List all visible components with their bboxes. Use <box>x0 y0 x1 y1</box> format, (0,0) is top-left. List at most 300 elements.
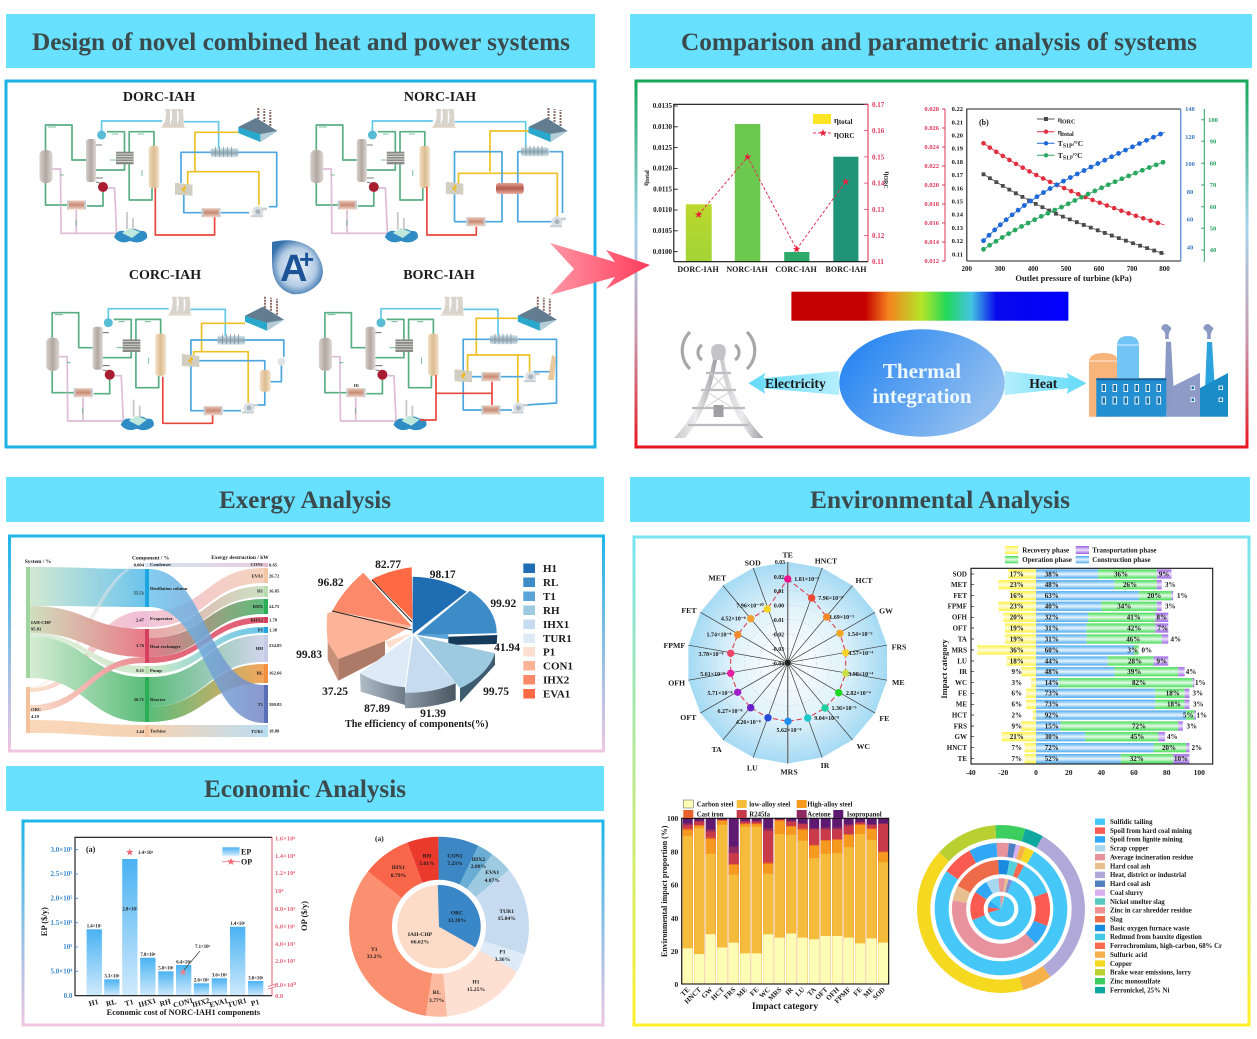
legend: waste streams: Spoil from hard coal mining <box>1110 828 1192 835</box>
line chart: outlet pressure of turbine: 0.19 <box>952 146 964 152</box>
radar chart: impact categories: 1.36×10⁻³ <box>832 706 857 712</box>
stacked bar chart: life-cycle phases: IR <box>959 668 968 676</box>
line chart: outlet pressure of turbine: 800 <box>1159 265 1170 273</box>
stacked bar chart: life-cycle phases: MRS <box>951 646 967 654</box>
legend: pie chart: P1 <box>543 646 555 658</box>
schematic: BORC-IAH: H1 <box>354 383 359 388</box>
donut chart: cost share: 33.38% <box>448 918 466 924</box>
sankey: exergy destruction flows: 24.75 <box>269 604 280 609</box>
sankey: exergy destruction flows: 55.51 <box>134 590 145 596</box>
legend: pie chart: IHX1 <box>543 619 569 631</box>
stacked bar chart: life-cycle phases: 45% <box>1130 733 1144 741</box>
bar chart: economic cost of components: Economic cost of NORC-IAH1 components <box>107 1008 261 1017</box>
stacked bar chart: life-cycle phases: 15% <box>1045 722 1059 730</box>
stacked bar chart: material contribution: HNCT <box>683 986 703 1006</box>
stacked bar chart: life-cycle phases: 48% <box>1045 581 1059 589</box>
legend: line chart: T <box>1058 151 1063 160</box>
legend: waste streams <box>1095 818 1222 994</box>
line chart: outlet pressure of turbine: 600 <box>1094 265 1105 273</box>
pie chart: efficiency of components: 82.77 <box>375 559 401 571</box>
legend: waste streams: Sulfidic tailing <box>1110 819 1153 826</box>
line chart: outlet pressure of turbine: 90 <box>1210 138 1216 146</box>
bar chart: economic cost of components: 1.6×10⁴ <box>275 836 295 842</box>
donut chart: cost share: IHX1 <box>392 865 405 871</box>
header: Comparison and parametric analysis of systems: Comparison and parametric analysis of systems <box>681 29 1197 56</box>
line chart: outlet pressure of turbine: 0.21 <box>952 120 963 126</box>
bar chart: economic cost of components: 2.5×10⁵ <box>51 870 72 878</box>
legend: waste streams: Sulfuric acid <box>1110 952 1147 959</box>
legend: phases: Operation phase <box>1022 556 1072 564</box>
legend: line chart: ORC <box>1062 120 1075 126</box>
stacked bar chart: material contribution: 0 <box>675 980 679 989</box>
bar chart: economic cost of components: 1.4×10⁴ <box>275 853 295 860</box>
bar chart: economic cost of components: 1.2×10⁴ <box>275 870 295 877</box>
stacked bar chart: life-cycle phases: LU <box>957 658 967 666</box>
legend: waste streams: Coal slurry <box>1110 890 1144 897</box>
bar chart: efficiency of four systems: total <box>839 118 852 126</box>
bar chart: efficiency of four systems: 0.0130 <box>653 123 672 131</box>
stacked bar chart: life-cycle phases: Impact category <box>939 639 949 699</box>
stacked bar chart: material contribution: 20 <box>671 947 679 956</box>
line chart: outlet pressure of turbine: 80 <box>1187 189 1193 196</box>
bar chart: efficiency of four systems: ORC <box>882 175 888 189</box>
legend: waste streams: Zinc monosulfate <box>1110 978 1160 986</box>
sankey: exergy destruction flows: TUR1 <box>251 729 264 734</box>
legend: pie chart: CON1 <box>543 660 573 672</box>
stacked bar chart: life-cycle phases: 19% <box>1010 624 1024 632</box>
series: T S1J <box>984 162 1164 249</box>
radar chart: impact categories: TE <box>782 550 793 560</box>
stacked bar chart: life-cycle phases: 9% <box>1159 570 1169 578</box>
stacked bar chart: life-cycle phases: 73% <box>1045 700 1059 708</box>
stacked bar chart: life-cycle phases: OFT <box>953 624 967 632</box>
header: Environmental Analysis: Environmental Analysis <box>810 487 1070 514</box>
bar chart: efficiency of four systems: 0.0100 <box>653 248 672 256</box>
legend: waste streams: Scrap copper <box>1110 846 1149 853</box>
line chart: outlet pressure of turbine: 140 <box>1185 106 1195 113</box>
legend: materials: Carbon steel <box>697 802 734 808</box>
line chart: outlet pressure of turbine: 100 <box>1185 161 1195 168</box>
radar chart: impact categories: 5.71×10⁻⁸ <box>708 691 733 697</box>
donut chart: cost share <box>367 834 516 1004</box>
arrow: red link between panels <box>550 243 650 295</box>
stacked bar chart: life-cycle phases: 19% <box>1010 636 1024 644</box>
legend: line chart: η <box>1058 128 1062 136</box>
legend: pie chart <box>523 563 573 700</box>
stacked bar chart: material contribution: LU <box>794 986 806 998</box>
line chart: outlet pressure of turbine: 300 <box>995 265 1006 273</box>
stacked bar chart: life-cycle phases: 3% <box>1011 679 1022 687</box>
stacked bar chart: life-cycle phases: 20% <box>1010 614 1024 622</box>
radar chart: impact categories: WC <box>857 742 870 751</box>
sankey: exergy destruction flows: 3.76 <box>136 643 145 648</box>
stacked bar chart: life-cycle phases: 28% <box>1128 658 1142 666</box>
legend: line chart: S1J <box>1063 156 1072 162</box>
stacked bar chart: life-cycle phases: 9% <box>1011 722 1022 730</box>
bar chart: economic cost of components: OP <box>241 858 252 866</box>
bar chart: economic cost of components: 5.0×10⁴ <box>158 966 174 972</box>
donut chart: cost share: T1 <box>371 947 378 953</box>
sankey: exergy destruction flows: RHX2 <box>250 618 264 622</box>
stacked bar chart: life-cycle phases: 72% <box>1132 722 1146 730</box>
bar chart: economic cost of components: 1.4×10⁴ <box>138 850 154 856</box>
arrow: heat <box>1005 371 1086 395</box>
stacked bar chart: life-cycle phases: 4% <box>1167 733 1178 741</box>
sankey: exergy destruction flows: 1.38 <box>269 628 278 632</box>
radar chart: impact categories: TA <box>712 745 722 754</box>
stacked bar chart: life-cycle phases: 31% <box>1045 636 1059 644</box>
radar chart: impact categories: 2.82×10⁻⁴ <box>846 691 871 697</box>
bar chart: economic cost of components: T1 <box>124 997 135 1008</box>
line chart: outlet pressure of turbine: 0.14 <box>952 212 964 218</box>
radar chart: impact categories: -0.01 <box>772 618 784 624</box>
stacked bar chart: life-cycle phases: 82% <box>1132 679 1146 687</box>
legend: pie chart: TUR1 <box>543 633 572 645</box>
legend: waste streams: Hard coal ash <box>1110 881 1151 888</box>
bar chart: efficiency of four systems <box>642 101 891 274</box>
bar chart: economic cost of components: EP <box>241 848 251 856</box>
bar chart: economic cost of components: 3.3×10⁴ <box>104 974 120 980</box>
donut chart: cost share: 8.79% <box>391 873 406 879</box>
stacked bar chart: life-cycle phases: 80 <box>1163 768 1171 777</box>
stacked bar chart: life-cycle phases: 18% <box>1167 700 1181 708</box>
radar chart: impact categories: FET <box>681 606 697 615</box>
bar chart: economic cost of components: 8.0×10³ <box>275 906 295 913</box>
legend: waste streams: Spoil from lignite mining <box>1110 837 1183 844</box>
sankey: exergy destruction flows: H1 <box>257 588 264 594</box>
bar chart: economic cost of components: 1.4×10⁵ <box>87 924 102 930</box>
callout: thermal integration <box>839 329 1005 437</box>
stacked bar chart: material contribution: FE <box>852 986 864 998</box>
stacked bar chart: life-cycle phases: 7% <box>1157 624 1168 632</box>
legend: line chart <box>1037 115 1083 162</box>
sankey: exergy destruction flows: 2.47 <box>136 618 145 622</box>
stacked bar chart: life-cycle phases: 63% <box>1045 592 1059 600</box>
stacked bar chart: life-cycle phases: 23% <box>1010 581 1024 589</box>
stacked bar chart: life-cycle phases: 20 <box>1065 768 1073 777</box>
donut chart: cost share: P1 <box>499 950 506 956</box>
sankey: exergy destruction flows: Condenser <box>150 562 171 567</box>
sankey: exergy destruction flows: 16.85 <box>269 588 280 594</box>
donut chart: cost share: 66.62% <box>411 940 429 946</box>
legend: phases: Construction phase <box>1092 556 1150 564</box>
bar chart: efficiency of four systems: ORC <box>839 132 854 140</box>
bar chart: economic cost of components: P1 <box>250 997 260 1008</box>
line chart: outlet pressure of turbine: 100 <box>1208 117 1218 124</box>
legend: materials: low-alloy steel <box>749 802 790 808</box>
radar chart: impact categories: 0.03 <box>775 560 785 566</box>
bar chart: efficiency of four systems: BORC-IAH <box>826 265 867 274</box>
radar chart: impact categories: 5.62×10⁻⁸ <box>777 728 802 734</box>
stacked bar chart: life-cycle phases: FPMF <box>948 602 967 610</box>
legend: waste streams: Hard coal ash <box>1110 863 1151 870</box>
stacked bar chart: life-cycle phases: 39% <box>1127 668 1141 676</box>
bar chart: efficiency of four systems: 0.0120 <box>653 164 672 172</box>
legend: pie chart: RH <box>543 605 560 617</box>
schematic: CORC-IAH <box>46 268 285 430</box>
line chart: outlet pressure of turbine: 70 <box>1210 182 1216 189</box>
line chart: outlet pressure of turbine: 0.028 <box>924 106 940 113</box>
schematic: NORC-IAH: NORC-IAH <box>404 90 476 105</box>
bar chart: efficiency of four systems: 0.11 <box>872 258 884 266</box>
donut chart: cost share: TUR1 <box>499 909 514 915</box>
radar chart: impact categories: ME <box>892 678 905 687</box>
stacked bar chart: life-cycle phases: 23% <box>1010 602 1024 610</box>
panel: economic analysis <box>23 821 603 1025</box>
radar chart: impact categories: 4.57×10⁻⁴ <box>848 651 873 657</box>
pie chart: efficiency of components: 37.25 <box>322 686 348 698</box>
radar chart: impact categories: 9.04×10⁻⁸ <box>814 716 839 722</box>
stacked bar chart: life-cycle phases: 41% <box>1127 614 1141 622</box>
sankey: exergy destruction flows: Turbine <box>150 728 166 734</box>
legend: line chart: /°C <box>1072 139 1083 148</box>
stacked bar chart: life-cycle phases: -20 <box>998 768 1009 777</box>
line chart: outlet pressure of turbine: 60 <box>1210 204 1216 211</box>
pie chart: efficiency of components: 99.75 <box>483 686 509 698</box>
legend: phases: Recovery phase <box>1022 546 1069 554</box>
line chart: outlet pressure of turbine: (b) <box>979 118 989 127</box>
legend: waste streams: Redmud from bauxite digestion <box>1110 934 1202 941</box>
stacked bar chart: life-cycle phases: 6% <box>1011 690 1022 698</box>
sankey: exergy destruction flows: 26.72 <box>269 574 280 578</box>
donut chart: cost share: 3.77% <box>429 998 445 1004</box>
donut chart: cost share: ORC <box>451 910 463 916</box>
logo: A+ badge: + <box>299 244 314 274</box>
bar chart: economic cost of components: 0.0 <box>64 992 73 1000</box>
stacked bar chart: material contribution: WC <box>758 986 772 1000</box>
stacked bar chart: life-cycle phases: 4% <box>1170 636 1181 644</box>
arrow: electricity: Electricity <box>765 376 826 391</box>
stacked bar chart: life-cycle phases: FE <box>958 690 967 698</box>
sankey: exergy destruction flows: T1 <box>258 702 264 707</box>
radar chart: impact categories: FE <box>879 714 889 723</box>
sankey: exergy destruction flows: 0.85 <box>269 562 278 568</box>
stacked bar chart: life-cycle phases: HCT <box>952 712 967 720</box>
schematic: CORC-IAH: CORC-IAH <box>129 268 201 283</box>
sankey: exergy destruction flows: 18.88 <box>269 728 280 734</box>
pie chart: efficiency of components: 99.92 <box>490 598 516 610</box>
bar chart: economic cost of components: OP ($/y) <box>299 901 309 931</box>
bar chart: economic cost of components: 6.0×10³ <box>275 924 295 930</box>
donut chart: cost share: EVA1 <box>485 870 499 876</box>
radar chart: impact categories: HCT <box>856 576 873 585</box>
legend: materials <box>683 800 882 818</box>
radar chart: impact categories: 1.81×10⁻⁵ <box>794 577 819 583</box>
radar chart: impact categories: 7.96×10⁻⁸ <box>818 596 843 602</box>
header: Comparison and parametric analysis of systems <box>630 14 1252 68</box>
legend: materials: R245fa <box>749 812 771 818</box>
sankey: exergy destruction flows: Component / % <box>132 556 169 562</box>
legend: phases <box>1005 546 1157 564</box>
line chart: outlet pressure of turbine: 80 <box>1210 160 1216 168</box>
stacked bar chart: life-cycle phases: 36% <box>1114 570 1128 578</box>
stacked bar chart: life-cycle phases: SOD <box>953 570 967 578</box>
stacked bar chart: life-cycle phases: 60 <box>1130 768 1138 777</box>
sankey: exergy destruction flows: Evaporator <box>150 616 173 621</box>
stacked bar chart: life-cycle phases: HNCT <box>947 744 967 752</box>
sankey: exergy destruction flows: System / % <box>25 559 51 565</box>
radar chart: impact categories: 0.02 <box>774 575 784 581</box>
line chart: outlet pressure of turbine: 0.12 <box>952 238 963 245</box>
stacked bar chart: life-cycle phases: FRS <box>954 722 967 730</box>
multi-ring chart: waste contribution <box>919 827 1083 991</box>
line chart: outlet pressure of turbine: 500 <box>1061 265 1072 273</box>
radar chart: impact categories: MRS <box>780 768 798 776</box>
stacked bar chart: material contribution: ME <box>735 986 749 999</box>
stacked bar chart: life-cycle phases: 1% <box>1196 712 1207 720</box>
stacked bar chart: life-cycle phases: 38% <box>1045 570 1059 578</box>
legend: waste streams: Copper <box>1110 961 1132 968</box>
stacked bar chart: material contribution <box>660 800 889 1012</box>
legend: waste streams: Slag <box>1110 916 1123 924</box>
sankey: exergy destruction flows: 95.81 <box>31 626 42 632</box>
legend: pie chart: EVA1 <box>543 688 570 700</box>
sankey: exergy destruction flows: 1.78 <box>269 618 278 622</box>
bar chart: economic cost of components: CON1 <box>172 996 194 1010</box>
bar chart: efficiency of four systems: η <box>834 129 839 139</box>
stacked bar chart: life-cycle phases: 20% <box>1147 592 1161 600</box>
radar chart: impact categories: MET <box>708 574 727 582</box>
donut chart: cost share: 33.2% <box>367 954 382 960</box>
stacked bar chart: life-cycle phases: 46% <box>1126 636 1140 644</box>
stacked bar chart: material contribution: 100 <box>667 814 679 823</box>
stacked bar chart: life-cycle phases: 20% <box>1162 744 1176 752</box>
stacked bar chart: life-cycle phases: 26% <box>1123 581 1137 589</box>
stacked bar chart: material contribution: HCT <box>710 986 726 1002</box>
radar chart: impact categories: 0.00 <box>774 604 784 610</box>
legend: materials: Acetone <box>807 812 831 818</box>
arrow: electricity <box>748 371 839 395</box>
stacked bar chart: life-cycle phases: 2% <box>1011 712 1022 720</box>
line chart: outlet pressure of turbine: 0.012 <box>924 258 939 265</box>
line chart: outlet pressure of turbine: 0.020 <box>924 182 939 189</box>
stacked bar chart: life-cycle phases: TE <box>958 755 967 763</box>
bar chart: economic cost of components: 0.0 <box>275 993 283 1000</box>
legend: line chart: T <box>1058 139 1063 148</box>
line chart: outlet pressure of turbine <box>924 106 1218 283</box>
donut chart: cost share: H1 <box>472 980 480 986</box>
schematic: DORC-IAH: DORC-IAH <box>123 90 195 105</box>
legend: pie chart: RL <box>543 577 558 589</box>
legend: waste streams: Basic oxygen furnace waste <box>1110 925 1189 932</box>
legend: line chart: η <box>1058 115 1062 124</box>
stacked bar chart: material contribution: OFT <box>814 986 830 1002</box>
bar chart: economic cost of components: 1.4×10⁵ <box>230 921 246 927</box>
line chart: outlet pressure of turbine: 0.18 <box>952 159 964 166</box>
legend: waste streams: Zinc in car shredder residue <box>1110 908 1192 915</box>
legend: waste streams: Nickel smelter slag <box>1110 899 1165 906</box>
stacked bar chart: life-cycle phases: OFH <box>952 614 968 622</box>
line chart: outlet pressure of turbine: 60 <box>1187 216 1193 224</box>
bar chart: efficiency of four systems: η <box>642 182 650 186</box>
pie chart: efficiency of components <box>296 559 520 730</box>
radar chart: impact categories: 5.61×10⁻⁸ <box>700 672 725 678</box>
line chart: outlet pressure of turbine: 0.018 <box>924 201 940 208</box>
bar chart: economic cost of components: 8.0×10⁰ <box>275 981 296 989</box>
stacked bar chart: life-cycle phases: ME <box>956 700 967 708</box>
pie chart: efficiency of components: The efficiency of components(%) <box>345 719 488 730</box>
donut chart: cost share: RH <box>423 854 432 860</box>
bar chart: efficiency of four systems: DORC-IAH <box>677 265 719 274</box>
stacked bar chart: life-cycle phases: 3% <box>1186 722 1197 730</box>
sankey: exergy destruction flows: CON1 <box>250 562 264 567</box>
schematic: BORC-IAH: BORC-IAH <box>403 268 475 283</box>
radar chart: impact categories: 6.27×10⁻⁸ <box>718 709 743 715</box>
sankey: exergy destruction flows: Heat exchanger <box>150 644 181 649</box>
donut chart: cost share: CON1 <box>447 854 463 860</box>
stacked bar chart: life-cycle phases: 30% <box>1045 733 1059 741</box>
stacked bar chart: life-cycle phases: 44% <box>1045 658 1059 666</box>
sankey: exergy destruction flows: ORC <box>31 707 41 712</box>
stacked bar chart: life-cycle phases: 18% <box>1010 658 1024 666</box>
line chart: outlet pressure of turbine: Outlet pressure of turbine (kPa) <box>1015 273 1132 283</box>
line chart: outlet pressure of turbine: 700 <box>1127 265 1138 273</box>
stacked bar chart: material contribution: ME <box>862 986 876 999</box>
stacked bar chart: life-cycle phases: 7% <box>1011 755 1022 763</box>
stacked bar chart: life-cycle phases: 8% <box>1156 614 1167 622</box>
bar chart: efficiency of four systems: total <box>645 170 651 182</box>
radar chart: impact categories: -0.03 <box>772 647 784 653</box>
stacked bar chart: life-cycle phases <box>939 546 1213 777</box>
bar chart: economic cost of components: IHX2 <box>191 996 211 1009</box>
line chart: outlet pressure of turbine: 120 <box>1185 134 1195 141</box>
bar chart: economic cost of components: EP ($/y) <box>39 907 49 936</box>
bar chart: economic cost of components: 6.4×10⁴ <box>176 960 192 966</box>
legend: waste streams: Brake wear emissions, lorry <box>1110 970 1192 977</box>
sankey: exergy destruction flows: Reactor <box>150 697 166 702</box>
sankey: exergy destruction flows: 1.44 <box>136 729 145 734</box>
radar chart: impact categories: IR <box>821 761 830 770</box>
line chart: outlet pressure of turbine: 200 <box>962 265 973 273</box>
stacked bar chart: material contribution: 40 <box>671 914 679 923</box>
panel: comparison and parametric analysis <box>636 81 1247 447</box>
stacked bar chart: life-cycle phases: 14% <box>1045 679 1059 687</box>
stacked bar chart: life-cycle phases: 17% <box>1010 570 1024 578</box>
stacked bar chart: life-cycle phases: 6% <box>1011 700 1022 708</box>
bar chart: economic cost of components <box>39 836 309 1017</box>
line chart: outlet pressure of turbine: 50 <box>1210 226 1216 232</box>
line chart: outlet pressure of turbine: 0.16 <box>952 186 964 192</box>
logo: A+ badge: A <box>280 248 307 290</box>
sankey: exergy destruction flows: 36.71 <box>134 697 145 702</box>
radar chart: impact categories: -0.04 <box>772 662 784 668</box>
bar chart: efficiency of four systems: 0.0125 <box>653 144 672 152</box>
stacked bar chart: life-cycle phases: 42% <box>1127 624 1141 632</box>
stacked bar chart: life-cycle phases: 16% <box>1010 592 1024 600</box>
radar chart: impact categories: FRS <box>892 642 906 652</box>
radar chart: impact categories: OFH <box>668 678 685 688</box>
sankey: exergy destruction flows: 4.19 <box>31 714 40 719</box>
header: Exergy Analysis <box>6 477 604 522</box>
bar chart: economic cost of components: (a) <box>86 845 96 854</box>
arrow: heat: Heat <box>1029 376 1058 391</box>
line chart: outlet pressure of turbine: 0.016 <box>924 220 940 227</box>
stacked bar chart: life-cycle phases: 1% <box>1177 592 1188 600</box>
stacked bar chart: life-cycle phases: 7% <box>1011 744 1022 752</box>
bar chart: economic cost of components: 4.0×10³ <box>275 941 295 948</box>
line chart: outlet pressure of turbine: 0.15 <box>952 198 964 206</box>
radar chart: impact categories: HNCT <box>815 556 838 566</box>
line chart: outlet pressure of turbine: 0.014 <box>924 239 940 246</box>
panel: environmental analysis <box>634 537 1249 1025</box>
radar chart: impact categories: 1.69×10⁻³ <box>829 615 854 621</box>
stacked bar chart: material contribution: Impact category <box>752 1002 818 1012</box>
legend: line chart: /°C <box>1071 151 1083 160</box>
stacked bar chart: life-cycle phases: 48% <box>1045 668 1059 676</box>
panel: exergy analysis <box>10 536 604 751</box>
radar chart: impact categories: 1.54×10⁻³ <box>848 632 873 638</box>
radar chart: impact categories: SOD <box>745 558 761 568</box>
